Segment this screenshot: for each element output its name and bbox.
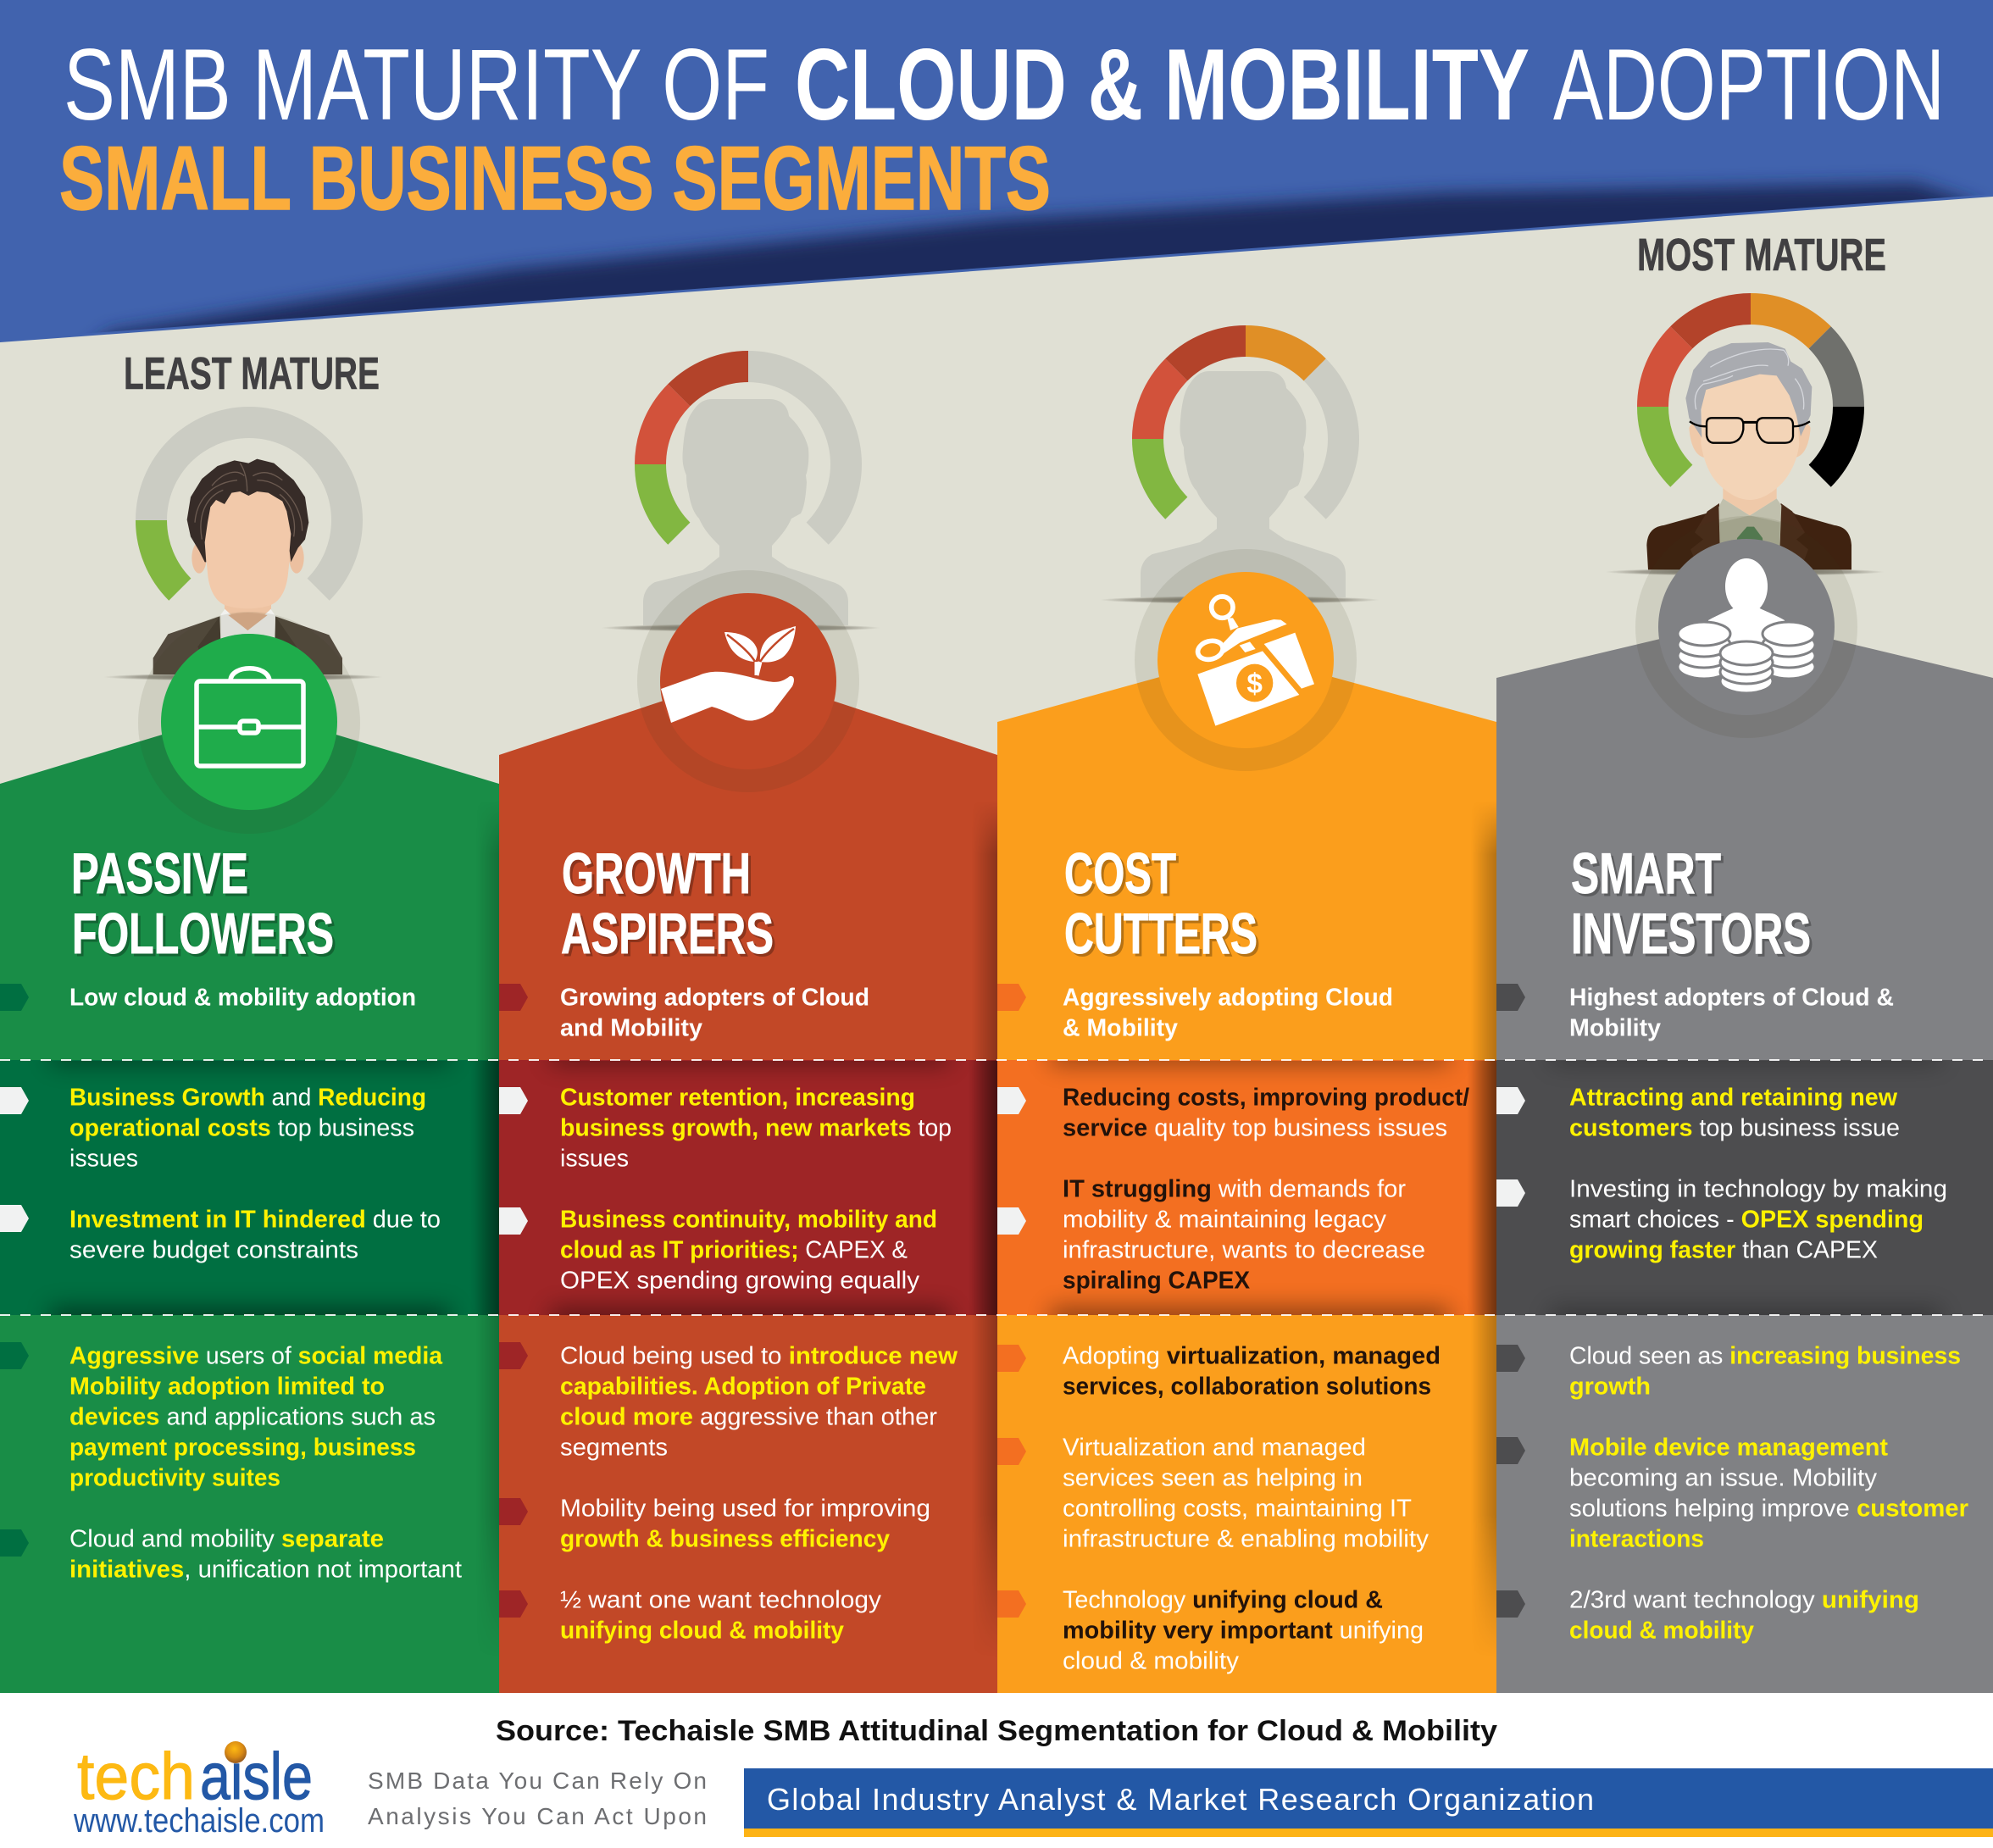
- text: cost cutters business issues: infrastructure, wants to decrease: [1063, 1237, 1425, 1264]
- text: smart investors cloud use: solutions helping improve customer: [1569, 1495, 1968, 1522]
- text: cost cutters summary: [1063, 985, 1393, 1042]
- logo: techaisle: aisle: [200, 1739, 313, 1813]
- text: cost cutters business issues: service quality top business issues: [1063, 1115, 1447, 1142]
- text: growth aspirers summary: and Mobility: [560, 1015, 702, 1042]
- heading: growth aspirers: [561, 841, 774, 966]
- text: growth aspirers business issues: Customer retention, increasing: [560, 1085, 915, 1112]
- icon badge: briefcase: [138, 612, 360, 834]
- gauge: cost cutters: [1132, 325, 1359, 519]
- title: CLOUD & MOBILITY: [795, 28, 1529, 142]
- text: smart investors business issues: Investing in technology by making: [1569, 1176, 1947, 1203]
- icon badge: scissors and cash: [1135, 549, 1357, 771]
- logo: techaisle: tech: [77, 1739, 195, 1813]
- text: smart investors cloud use: Mobile device management: [1569, 1434, 1888, 1461]
- title: [64, 28, 1945, 142]
- subtitle: SMALL BUSINESS SEGMENTS: [59, 127, 1051, 229]
- heading: passive followers: [71, 841, 334, 966]
- bust shadows: [103, 568, 1885, 681]
- icon badge: scissors and cash: $: [1246, 669, 1263, 700]
- text: passive followers business issues: Business Growth and Reducing: [69, 1085, 426, 1112]
- text: smart investors business issues: smart choices - OPEX spending: [1569, 1207, 1924, 1234]
- heading: cost cutters: COST: [1064, 841, 1176, 906]
- text: smart investors business issues: growing faster than CAPEX: [1569, 1237, 1878, 1264]
- icon badge: plant in hand: [637, 570, 859, 792]
- gauge: smart investors: [1637, 293, 1864, 487]
- heading: passive followers: PASSIVE: [71, 841, 248, 906]
- text: passive followers cloud use: devices and applications such as: [69, 1403, 436, 1430]
- panel: passive followers: [0, 708, 499, 1693]
- dashed dividers: [0, 1060, 1993, 1315]
- text: cost cutters cloud use: Virtualization and managed: [1063, 1434, 1366, 1461]
- text: growth aspirers business issues: cloud as IT priorities; CAPEX &: [560, 1237, 908, 1264]
- text: cost cutters cloud use: mobility very important unifying: [1063, 1617, 1424, 1644]
- text: cost cutters cloud use: Adopting virtualization, managed: [1063, 1342, 1441, 1369]
- person: smart investor: [1646, 342, 1851, 569]
- text: passive followers cloud use: initiatives, unification not important: [69, 1556, 462, 1583]
- text: smart investors cloud use: [1569, 1342, 1968, 1644]
- text: growth aspirers cloud use: Cloud being used to introduce new: [560, 1342, 958, 1369]
- text: cost cutters cloud use: cloud & mobility: [1063, 1647, 1240, 1674]
- text: smart investors cloud use: becoming an issue. Mobility: [1569, 1464, 1878, 1491]
- text: passive followers summary: Low cloud & mobility adoption: [69, 985, 416, 1012]
- text: smart investors business issues: [1569, 1085, 1947, 1264]
- text: growth aspirers cloud use: capabilities. Adoption of Private: [560, 1373, 926, 1400]
- gauge: passive followers: [136, 407, 363, 601]
- heading: growth aspirers: GROWTH: [562, 841, 751, 906]
- text: cost cutters cloud use: Technology unifying cloud &: [1063, 1586, 1383, 1613]
- person silhouette: growth aspirer: [643, 399, 848, 625]
- text: cost cutters cloud use: controlling costs, maintaining IT: [1063, 1495, 1412, 1522]
- text: smart investors business issues: customers top business issue: [1569, 1115, 1900, 1142]
- text: growth aspirers business issues: issues: [560, 1146, 629, 1173]
- text: cost cutters cloud use: services seen as helping in: [1063, 1464, 1363, 1491]
- text: passive followers cloud use: Mobility adoption limited to: [69, 1373, 385, 1400]
- text: cost cutters business issues: mobility & maintaining legacy: [1063, 1207, 1386, 1234]
- text: growth aspirers cloud use: unifying cloud & mobility: [560, 1617, 844, 1644]
- panel: growth aspirers: [499, 673, 997, 1693]
- text: smart investors cloud use: cloud & mobility: [1569, 1617, 1754, 1644]
- text: cost cutters business issues: Reducing costs, improving product/: [1063, 1085, 1469, 1112]
- banner: global analyst: [744, 1768, 1993, 1837]
- text: cost cutters summary: & Mobility: [1063, 1015, 1178, 1042]
- text: smart investors summary: Mobility: [1569, 1015, 1661, 1042]
- heading: cost cutters: CUTTERS: [1064, 902, 1257, 966]
- person silhouette: cost cutter: [1141, 371, 1346, 597]
- logo: techaisle: www.techaisle.com: [73, 1802, 325, 1840]
- text: passive followers cloud use: productivity suites: [69, 1464, 280, 1491]
- heading: growth aspirers: ASPIRERS: [561, 902, 774, 966]
- tagline: Analysis You Can Act Upon: [368, 1803, 707, 1829]
- text: passive followers cloud use: [69, 1342, 462, 1583]
- header banner: [0, 0, 1993, 356]
- text: cost cutters summary: Aggressively adopting Cloud: [1063, 985, 1393, 1012]
- tagline: SMB Data You Can Rely On: [368, 1768, 707, 1794]
- logo: techaisle: [73, 1739, 325, 1840]
- gauge: growth aspirers: [635, 351, 862, 545]
- text: passive followers business issues: severe budget constraints: [69, 1237, 358, 1264]
- text: cost cutters business issues: spiraling CAPEX: [1063, 1268, 1251, 1295]
- panel: cost cutters: [997, 653, 1496, 1693]
- text: growth aspirers business issues: Business continuity, mobility and: [560, 1207, 937, 1234]
- text: growth aspirers summary: [560, 985, 869, 1042]
- text: smart investors summary: [1569, 985, 1894, 1042]
- text: growth aspirers summary: Growing adopters of Cloud: [560, 985, 869, 1012]
- heading: passive followers: FOLLOWERS: [72, 902, 334, 966]
- source line: Source: Techaisle SMB Attitudinal Segmentation for Cloud & Mobility: [496, 1715, 1497, 1747]
- text: passive followers business issues: [69, 1085, 441, 1264]
- text: smart investors business issues: Attracting and retaining new: [1569, 1085, 1897, 1112]
- text: growth aspirers cloud use: ½ want one want technology: [560, 1586, 882, 1613]
- text: passive followers business issues: issues: [69, 1146, 138, 1173]
- text: growth aspirers business issues: OPEX spending growing equally: [560, 1268, 919, 1295]
- text: smart investors summary: Highest adopters of Cloud &: [1569, 985, 1894, 1012]
- title: SMB MATURITY OF: [64, 28, 769, 142]
- label: most mature: MOST MATURE: [1637, 230, 1886, 280]
- heading: smart investors: [1571, 841, 1811, 966]
- text: smart investors cloud use: 2/3rd want technology unifying: [1569, 1586, 1919, 1613]
- text: passive followers cloud use: Cloud and mobility separate: [69, 1525, 384, 1552]
- text: growth aspirers business issues: [560, 1085, 952, 1295]
- text: smart investors cloud use: growth: [1569, 1373, 1651, 1400]
- text: growth aspirers business issues: business growth, new markets top: [560, 1115, 952, 1142]
- text: cost cutters cloud use: services, collaboration solutions: [1063, 1373, 1431, 1400]
- person: passive follower: [153, 459, 342, 674]
- text: cost cutters cloud use: infrastructure & enabling mobility: [1063, 1525, 1430, 1552]
- text: cost cutters business issues: IT struggling with demands for: [1063, 1176, 1406, 1203]
- heading: cost cutters: [1064, 841, 1257, 966]
- text: passive followers business issues: operational costs top business: [69, 1115, 414, 1142]
- text: cost cutters cloud use: [1063, 1342, 1441, 1674]
- text: smart investors cloud use: Cloud seen as increasing business: [1569, 1342, 1961, 1369]
- bullet tabs: [0, 984, 1525, 1618]
- heading: smart investors: INVESTORS: [1571, 902, 1811, 966]
- text: growth aspirers cloud use: [560, 1342, 958, 1644]
- text: growth aspirers cloud use: Mobility being used for improving: [560, 1495, 930, 1522]
- text: smart investors cloud use: interactions: [1569, 1525, 1704, 1552]
- banner: global analyst: Global Industry Analyst & Market Research Organization: [767, 1782, 1594, 1817]
- icon badge: investor with coins: [1635, 516, 1857, 738]
- tagline: [368, 1768, 707, 1829]
- text: growth aspirers cloud use: cloud more aggressive than other: [560, 1403, 937, 1430]
- text: cost cutters business issues: [1063, 1085, 1469, 1295]
- label: least mature: LEAST MATURE: [124, 348, 380, 399]
- text: passive followers cloud use: payment processing, business: [69, 1434, 416, 1461]
- text: passive followers business issues: Investment in IT hindered due to: [69, 1207, 441, 1234]
- heading: smart investors: SMART: [1571, 841, 1721, 906]
- text: passive followers cloud use: Aggressive users of social media: [69, 1342, 443, 1369]
- text: growth aspirers cloud use: growth & business efficiency: [560, 1525, 890, 1552]
- text: growth aspirers cloud use: segments: [560, 1434, 668, 1461]
- panel: smart investors: [1496, 619, 1993, 1693]
